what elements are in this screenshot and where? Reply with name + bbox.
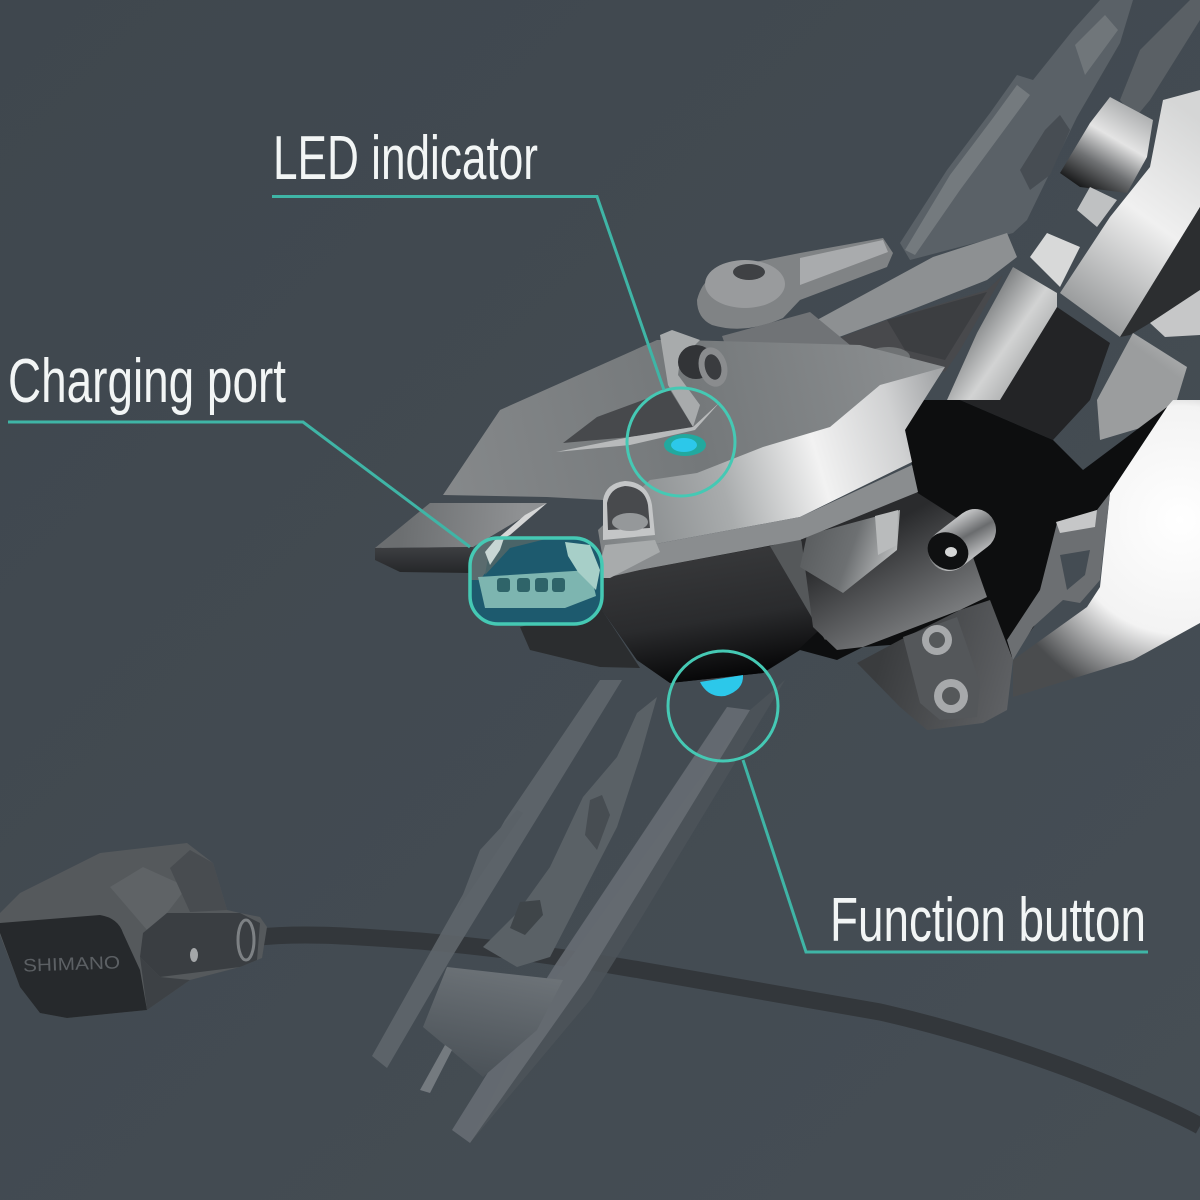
leader line: function button bbox=[743, 760, 1148, 952]
plug brand text: SHIMANO bbox=[23, 952, 120, 976]
derailleur silver arm and black body bbox=[600, 267, 1200, 697]
ghosted sprocket, upper bbox=[900, 0, 1200, 260]
derailleur main body, top plate bbox=[443, 330, 945, 578]
highlight ring: function button bbox=[668, 651, 778, 761]
label: LED indicator: LED indicator bbox=[273, 124, 538, 193]
highlight ring: LED indicator bbox=[627, 388, 735, 496]
icon: function button bbox=[700, 675, 743, 696]
derailleur upper mount and cylinder bbox=[1030, 90, 1200, 337]
derailleur lower plate and bolts bbox=[800, 490, 1013, 730]
derailleur front tab bbox=[375, 503, 640, 668]
charging port connector bbox=[470, 535, 602, 624]
charging cable bbox=[250, 935, 1200, 1126]
leader line: charging port bbox=[8, 422, 470, 547]
label: Charging port: Charging port bbox=[8, 347, 286, 416]
ghosted pulley cage, lower bbox=[372, 680, 785, 1143]
charging plug bbox=[0, 843, 267, 1018]
highlight frame: charging port bbox=[470, 538, 602, 624]
derailleur linkage arms bbox=[697, 233, 1017, 372]
icon: LED indicator light bbox=[664, 434, 706, 456]
leader line: LED indicator bbox=[272, 196, 664, 390]
